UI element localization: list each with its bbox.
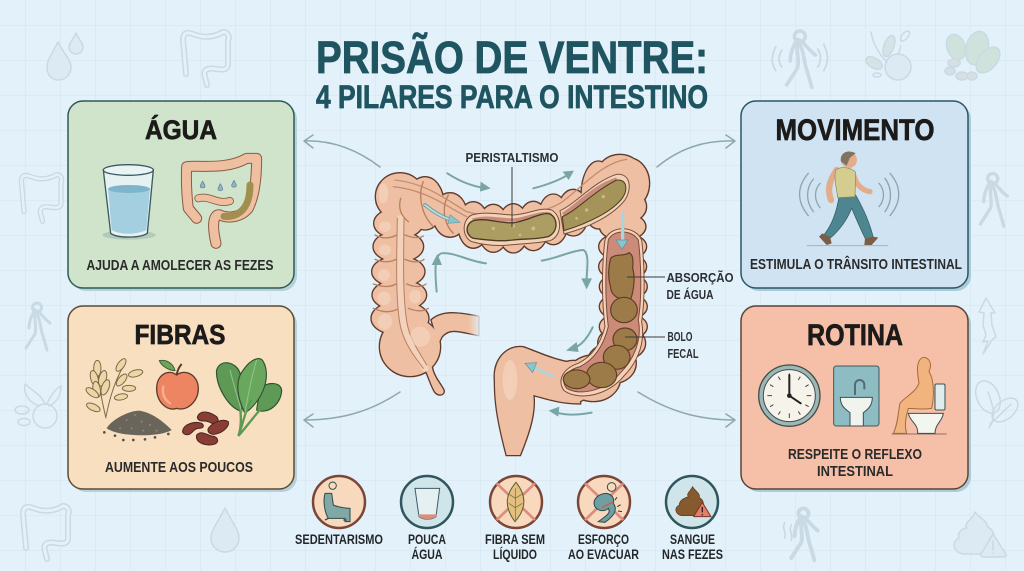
label: absorcao de agua: ABSORÇÃO bbox=[666, 270, 734, 285]
caption: RESPEITE O REFLEXO bbox=[788, 446, 922, 463]
warning signs row bbox=[295, 476, 723, 562]
arrow: to rotina bbox=[638, 392, 735, 427]
icon: walker top right bbox=[772, 31, 827, 87]
soft highlights bbox=[377, 183, 517, 400]
arrow: flow 4 bbox=[542, 250, 592, 289]
sign: sedentarismo: SEDENTARISMO bbox=[295, 532, 383, 547]
icon: walking man bbox=[800, 151, 899, 246]
panel: fibras bbox=[68, 306, 297, 492]
arrow: to fibras bbox=[304, 392, 400, 427]
sign: fibra sem liquido: LÍQUIDO bbox=[493, 547, 537, 562]
sign: esforco ao evacuar: AO EVACUAR bbox=[568, 547, 639, 562]
caption: AUMENTE AOS POUCOS bbox=[105, 459, 253, 476]
sign: esforco ao evacuar: ESFORÇO bbox=[578, 532, 629, 547]
sign: sangue nas fezes: SANGUE bbox=[670, 532, 715, 547]
arrow: to agua bbox=[304, 135, 380, 167]
icon: glass of water bbox=[102, 165, 156, 240]
label: bolo fecal: FECAL bbox=[668, 347, 699, 361]
icon: drop bottom bbox=[211, 508, 239, 552]
icon: person on toilet bbox=[892, 357, 947, 434]
caption: AJUDA A AMOLECER AS FEZES bbox=[86, 257, 274, 274]
colon illustration bbox=[372, 155, 649, 455]
title bbox=[316, 32, 708, 115]
caption: ESTIMULA O TRÂNSITO INTESTINAL bbox=[750, 255, 962, 273]
panel: rotina bbox=[741, 306, 971, 492]
arrow: flow 5 bbox=[566, 327, 593, 352]
sign: sedentarismo bbox=[295, 476, 383, 547]
icon: walker right bbox=[980, 174, 1007, 226]
arrow: lumen 2 bbox=[616, 212, 628, 249]
sign: pouca agua: ÁGUA bbox=[412, 547, 443, 562]
icon: small colon bbox=[186, 158, 257, 243]
highlights and folds bbox=[373, 159, 627, 368]
sign: fibra sem liquido bbox=[485, 476, 545, 562]
label: bolo fecal bbox=[625, 330, 699, 361]
icon: sink bbox=[834, 366, 879, 426]
sign: sangue nas fezes bbox=[662, 476, 723, 562]
panel: agua bbox=[68, 101, 297, 291]
icon: apple bbox=[157, 360, 198, 409]
heading: ROTINA bbox=[807, 319, 903, 352]
icon: colon bottom left bbox=[23, 506, 69, 559]
heading: FIBRAS bbox=[134, 319, 226, 350]
icon: walker left bbox=[26, 303, 50, 350]
icon: clock bbox=[759, 365, 820, 426]
colon body bbox=[372, 155, 649, 455]
icon: arrow right bbox=[979, 298, 996, 354]
icon: colon left bbox=[21, 175, 62, 221]
caption: INTESTINAL bbox=[817, 463, 893, 480]
sign: esforco ao evacuar bbox=[568, 476, 639, 562]
sign: pouca agua bbox=[401, 476, 453, 562]
icon: walker bottom bbox=[784, 508, 818, 560]
label: absorcao de agua bbox=[627, 270, 734, 302]
icon: colon top left bbox=[183, 32, 229, 85]
heading: ÁGUA bbox=[145, 114, 217, 145]
arrow: lumen 1 bbox=[425, 205, 460, 223]
sign: fibra sem liquido: FIBRA SEM bbox=[485, 532, 545, 547]
icon: plant left bbox=[15, 384, 61, 428]
title line 2: 4 PILARES PARA O INTESTINO bbox=[316, 79, 708, 115]
heading: MOVIMENTO bbox=[776, 114, 934, 147]
flow arrows bbox=[425, 171, 628, 417]
arrow: flow 3 bbox=[432, 253, 486, 292]
label: bolo fecal: BOLO bbox=[668, 330, 693, 344]
panel: movimento bbox=[741, 101, 971, 291]
arrow: to movimento bbox=[657, 135, 735, 167]
icon: leaves right bbox=[971, 377, 1022, 428]
icon: spinach bbox=[216, 359, 282, 436]
label: absorcao de agua: DE ÁGUA bbox=[666, 287, 714, 302]
descending colon window bbox=[561, 229, 644, 396]
arrow: flow 6 bbox=[549, 407, 592, 417]
arrow: lumen 3 bbox=[525, 363, 553, 377]
icon: water drops bbox=[47, 33, 83, 80]
arrow: flow 2 bbox=[533, 171, 574, 188]
icon: spinach and beans top right bbox=[943, 29, 1005, 80]
icon: stool warning bottom right bbox=[954, 512, 1006, 557]
label: peristaltismo bbox=[466, 151, 559, 227]
icon: wheat bbox=[84, 357, 144, 418]
transverse colon window bbox=[464, 174, 629, 246]
title line 1: PRISÃO DE VENTRE: bbox=[316, 32, 708, 83]
arrows to panels bbox=[304, 135, 735, 427]
caption bbox=[788, 446, 922, 480]
sign: pouca agua: POUCA bbox=[408, 532, 446, 547]
icon: chia pile bbox=[103, 411, 172, 441]
sign: sangue nas fezes: NAS FEZES bbox=[662, 547, 723, 562]
arrow: flow 1 bbox=[447, 173, 491, 192]
icon: plants top right bbox=[864, 29, 911, 80]
label: peristaltismo: PERISTALTISMO bbox=[466, 151, 559, 165]
icon: beans bbox=[183, 412, 229, 445]
